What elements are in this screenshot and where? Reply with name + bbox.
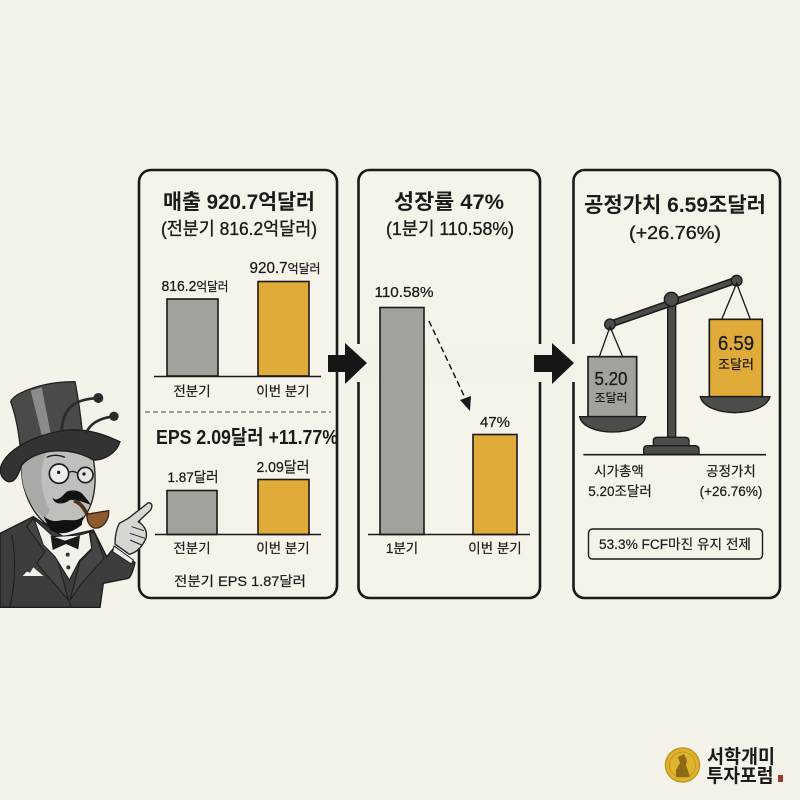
logo: coin and forum name <box>666 746 783 787</box>
heading: EPS: EPS 2.09달러 +11.77% <box>156 426 338 449</box>
callout: FCF margin: 53.3% FCF마진 유지 전제 <box>599 537 751 552</box>
bar chart: EPS: 1.87달러 <box>168 469 218 485</box>
mustache <box>53 490 91 505</box>
bar chart: growth: 1분기 <box>386 541 418 556</box>
bar chart: EPS: 전분기 <box>173 541 211 556</box>
bar chart: growth <box>368 284 530 556</box>
value label: fair value block: 6.59 <box>718 333 754 355</box>
arrow: decline <box>429 321 471 411</box>
subheading: previous quarter revenue: (전분기 816.2억달러) <box>161 219 317 239</box>
panel: revenue and EPS <box>139 170 338 598</box>
bow tie <box>51 535 80 550</box>
icon: mascot with top hat and pipe <box>0 382 152 607</box>
panel: fair value: 조달러 <box>594 391 628 405</box>
arrow: panel 2 to panel 3 <box>534 343 574 384</box>
panel: fair value <box>574 170 780 598</box>
glasses <box>49 464 69 483</box>
icon: gold coin <box>666 748 700 782</box>
callout: FCF margin <box>588 529 762 559</box>
jacket <box>0 517 135 607</box>
bar chart: EPS: 2.09달러 <box>256 459 310 476</box>
bar chart: EPS <box>155 459 321 556</box>
bar chart: growth: 47% <box>480 414 510 431</box>
hand <box>115 503 152 554</box>
bar chart: revenue <box>154 260 321 399</box>
bar chart: revenue: 전분기 <box>173 384 211 399</box>
note: previous EPS: 전분기 EPS 1.87달러 <box>174 574 306 589</box>
bar chart: revenue: 이번 분기 <box>256 384 310 399</box>
subheading: Q1 growth: (1분기 110.58%) <box>386 219 514 239</box>
bar chart: growth: 110.58% <box>374 284 434 301</box>
logo: coin and forum name: 투자포럼 <box>706 765 774 787</box>
arrow: panel 1 to panel 2 <box>328 343 367 384</box>
bar chart: revenue: 816.2억달러 <box>162 278 228 295</box>
label: fair value: 공정가치 <box>706 464 756 479</box>
heading: revenue: 매출 920.7억달러 <box>163 191 315 214</box>
head <box>21 450 95 530</box>
antennae <box>62 398 112 433</box>
lapels <box>27 518 104 600</box>
hat brim <box>0 430 120 482</box>
icon: balance scale <box>580 275 770 455</box>
bar chart: revenue: 920.7억달러 <box>250 260 320 277</box>
pipe <box>74 501 89 518</box>
label: market cap: 시가총액 <box>594 464 644 479</box>
panel: fair value: (+26.76%) <box>700 484 762 499</box>
value label: market cap block: 5.20 <box>594 369 628 389</box>
logo: coin and forum name: 서학개미 <box>707 746 775 768</box>
hat crown <box>11 382 83 445</box>
heading: fair value: 공정가치 6.59조달러 <box>584 194 766 217</box>
bar chart: growth: 이번 분기 <box>468 541 522 556</box>
panel: growth rate <box>358 170 540 598</box>
shirt <box>34 519 92 580</box>
panel: fair value: 조달러 <box>718 357 754 372</box>
bar chart: EPS: 이번 분기 <box>256 541 310 556</box>
heading: growth: 성장률 47% <box>394 191 504 214</box>
subheading: upside: (+26.76%) <box>629 223 721 243</box>
panel: fair value: 5.20조달러 <box>588 484 652 499</box>
